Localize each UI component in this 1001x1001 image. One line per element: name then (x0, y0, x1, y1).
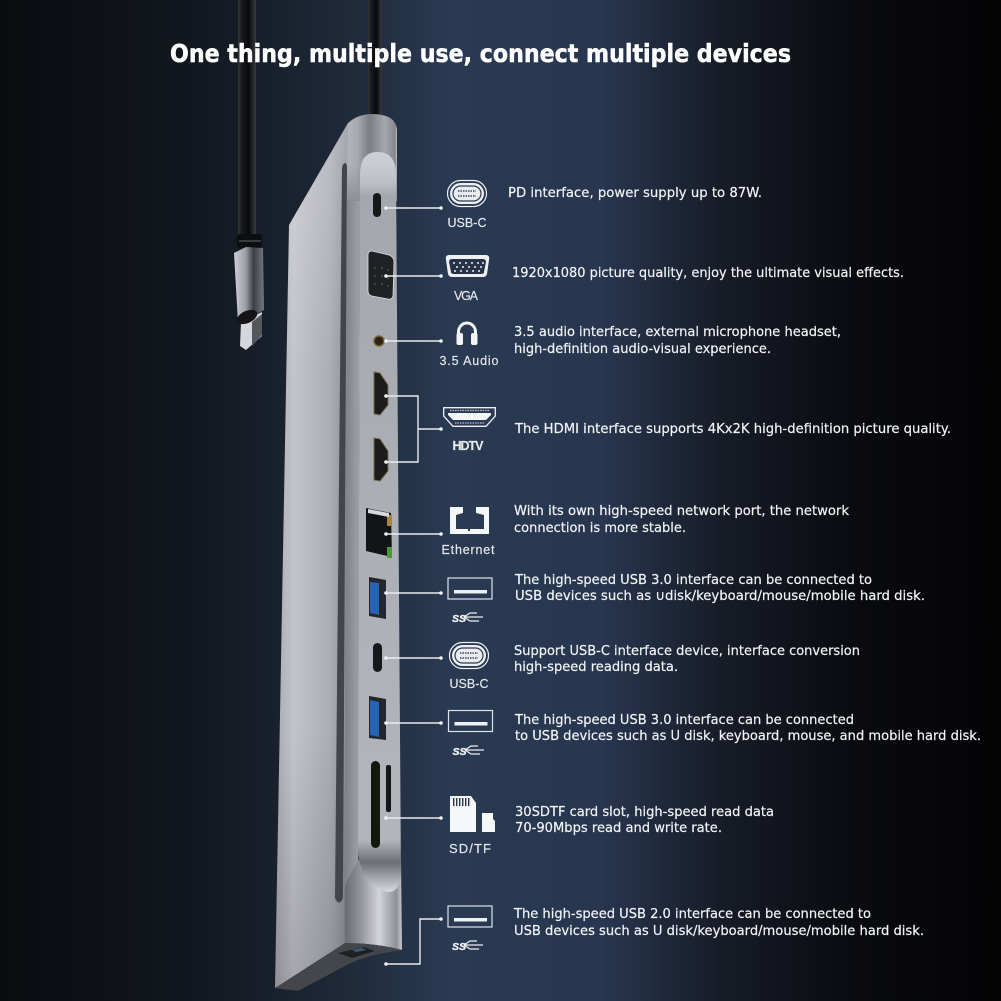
text: SD: 30SDTF card slot, high-speed read data (515, 804, 774, 820)
text: USB-C second: high-speed reading data. (514, 659, 678, 675)
text: Ethernet: connection is more stable. (514, 520, 686, 536)
text: USB 3.0 second (514, 712, 981, 744)
port: VGA (368, 251, 394, 299)
port: TF slot (386, 765, 391, 812)
port: Ethernet (366, 508, 392, 558)
text: USB 3.0 second: The high-speed USB 3.0 interface can be connected (514, 712, 854, 728)
hub front panel (358, 152, 401, 892)
label: HDTV: HDTV (452, 439, 484, 453)
text: Ethernet (514, 503, 849, 536)
text: USB 3.0 first: The high-speed USB 3.0 interface can be connected to (514, 572, 872, 588)
text: Ethernet: With its own high-speed network port, the network (514, 503, 849, 519)
hub end cap top (347, 114, 397, 200)
icon: USB 3.0 B (448, 710, 492, 732)
label: SD/TF: SD/TF (449, 841, 491, 856)
text: audio: 3.5 audio interface, external microphone headset, (514, 324, 841, 340)
text: VGA: 1920x1080 picture quality, enjoy the ultimate visual effects. (512, 265, 904, 281)
icon: SS USB logo 2 (452, 746, 484, 758)
port: 3.5 audio (374, 336, 384, 346)
label: 3.5 Audio: 3.5 Audio (440, 354, 499, 368)
cable: top of hub (368, 0, 382, 116)
icon: Ethernet (450, 507, 489, 534)
hub strip beside panel (344, 190, 360, 945)
port: SD slot (371, 761, 380, 848)
port: USB-C 1 (373, 193, 381, 217)
icon: SD and TF cards (450, 796, 495, 832)
text: USB-C second (514, 643, 860, 675)
hub end cap bottom (345, 860, 402, 950)
hub cap fade into strip (347, 165, 397, 201)
text: USB 2.0 (513, 906, 924, 939)
port: HDMI 1 (374, 372, 388, 415)
icon: USB 2.0 A (448, 906, 492, 927)
port: USB 3.0 B (369, 696, 386, 740)
cable: left (238, 0, 256, 236)
icon: SS USB logo 3 (452, 941, 483, 953)
icon: SS USB logo 3: SS (452, 941, 466, 953)
connector lines (384, 206, 443, 966)
icon: USB-C 1 (448, 180, 486, 206)
label: Ethernet: Ethernet (442, 543, 495, 557)
text: USB 3.0 first: USB devices such as ∪disk/keyboard/mouse/mobile hard disk. (515, 588, 925, 604)
icon: HDMI (444, 408, 495, 426)
port: USB-C 2 (373, 643, 382, 672)
text: USB 2.0: USB devices such as U disk/keyboard/mouse/mobile hard disk. (514, 923, 924, 939)
label: USB-C: USB-C (448, 216, 486, 230)
text: HDMI: The HDMI interface supports 4Kx2K high-definition picture quality. (514, 421, 951, 437)
text: USB-C second: Support USB-C interface device, interface conversion (514, 643, 860, 659)
icon: SS USB logo 2: SS (452, 746, 467, 758)
label: USB-C 2: USB-C (450, 677, 488, 691)
hub side face (275, 123, 348, 988)
icon: VGA (446, 255, 489, 277)
text: audio: high-definition audio-visual experience. (514, 341, 771, 357)
text: SD (515, 804, 774, 836)
hub body (275, 114, 402, 991)
port: USB 3.0 A (369, 577, 386, 619)
USB-C plug (234, 234, 264, 350)
icon: SS USB logo: SS (452, 613, 466, 625)
icon: SS USB logo (452, 613, 483, 625)
text: SD: 70-90Mbps read and write rate. (515, 820, 722, 836)
text: USB 3.0 first (514, 572, 925, 604)
icon: USB 3.0 A (448, 578, 492, 599)
label: VGA: VGA (454, 289, 479, 303)
text: audio (514, 324, 841, 357)
icon: USB-C 2 (450, 642, 488, 668)
icon: headphones (456, 323, 478, 345)
hub bottom wedge with USB 2.0 port (275, 943, 402, 991)
hub side slit (335, 163, 347, 902)
text: USB 2.0: The high-speed USB 2.0 interface can be connected to (513, 906, 871, 922)
title: One thing, multiple use, connect multiple devices (170, 39, 791, 68)
port: HDMI 2 (374, 438, 388, 481)
text: PD: PD interface, power supply up to 87W. (508, 185, 762, 201)
text: USB 3.0 second: to USB devices such as U disk, keyboard, mouse, and mobile hard disk. (515, 728, 981, 744)
